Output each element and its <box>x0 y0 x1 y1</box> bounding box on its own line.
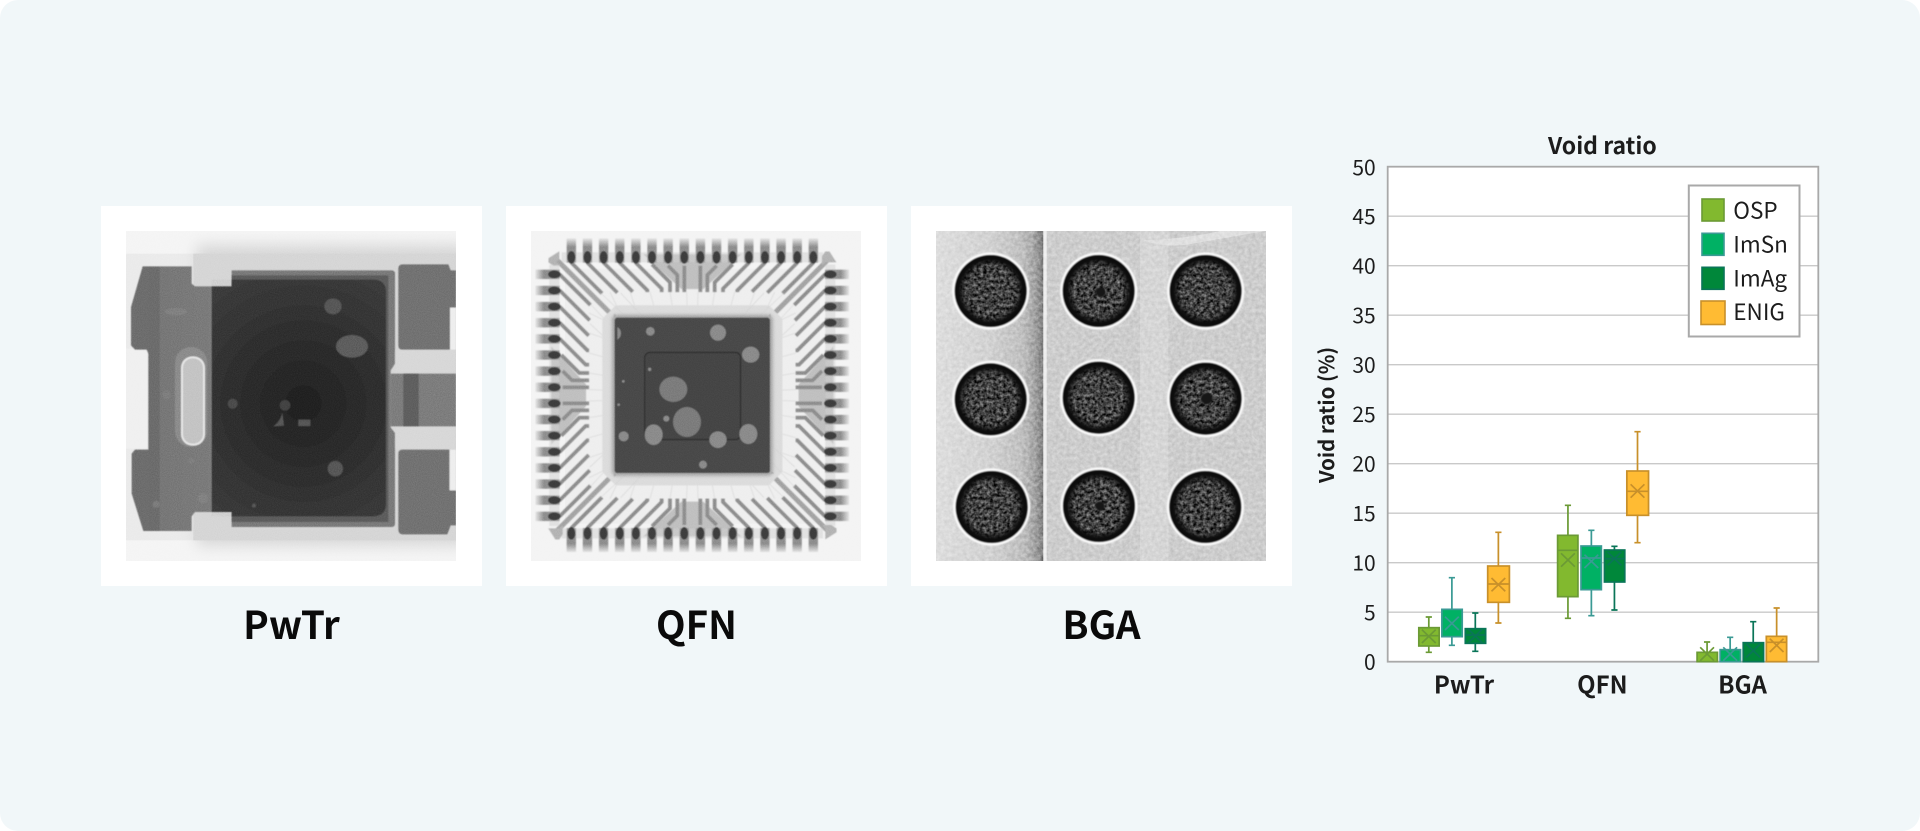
y axis tick labels: 5 <box>1364 597 1376 627</box>
box plots: BGA <box>1697 608 1787 662</box>
die pad <box>612 315 773 476</box>
panel: BGA x-ray <box>911 206 1292 586</box>
x axis category labels: BGA <box>1718 665 1767 700</box>
panel: QFN x-ray <box>506 206 887 586</box>
voids <box>617 325 759 469</box>
plot area <box>1388 167 1818 662</box>
pad <box>212 270 395 527</box>
voids <box>152 298 368 508</box>
image: BGA x-ray <box>936 231 1266 561</box>
image: QFN x-ray <box>531 231 861 561</box>
legend: OSP <box>1733 193 1778 225</box>
label: PwTr: PwTr <box>243 595 340 651</box>
box plots: PwTr <box>1419 532 1509 652</box>
left lead <box>131 266 212 531</box>
label: QFN: QFN <box>656 595 737 651</box>
center tab <box>391 374 456 426</box>
y axis tick labels: 45 <box>1352 201 1376 231</box>
y axis tick labels: 25 <box>1352 399 1376 429</box>
y axis tick labels <box>1352 152 1376 677</box>
y axis tick labels: 40 <box>1352 251 1376 281</box>
lead slot <box>175 347 207 447</box>
y axis title: Void ratio (%) <box>1310 347 1340 484</box>
y axis tick labels: 30 <box>1352 350 1376 380</box>
x axis category labels <box>1434 665 1767 700</box>
legend: ImSn <box>1733 227 1788 259</box>
y axis tick labels: 10 <box>1352 548 1376 578</box>
y axis tick labels: 35 <box>1352 300 1376 330</box>
label: BGA: BGA <box>1062 595 1141 651</box>
y axis tick labels: 0 <box>1364 647 1376 677</box>
inner die outline <box>645 352 741 440</box>
right leads <box>398 264 456 350</box>
legend: ENIG <box>1733 295 1785 327</box>
image: PwTr x-ray <box>126 231 456 561</box>
box plots: QFN <box>1558 432 1649 618</box>
y axis tick labels: 15 <box>1352 498 1376 528</box>
x axis category labels: QFN <box>1577 665 1628 700</box>
solder balls <box>953 254 1243 544</box>
legend: ImAg <box>1733 262 1787 294</box>
die <box>212 280 386 516</box>
y axis tick labels: 50 <box>1352 152 1376 182</box>
panel: PwTr x-ray <box>101 206 482 586</box>
x axis category labels: PwTr <box>1434 665 1495 700</box>
legend <box>1689 186 1800 336</box>
chart title: Void ratio <box>1547 127 1657 161</box>
y axis tick labels: 20 <box>1352 449 1376 479</box>
